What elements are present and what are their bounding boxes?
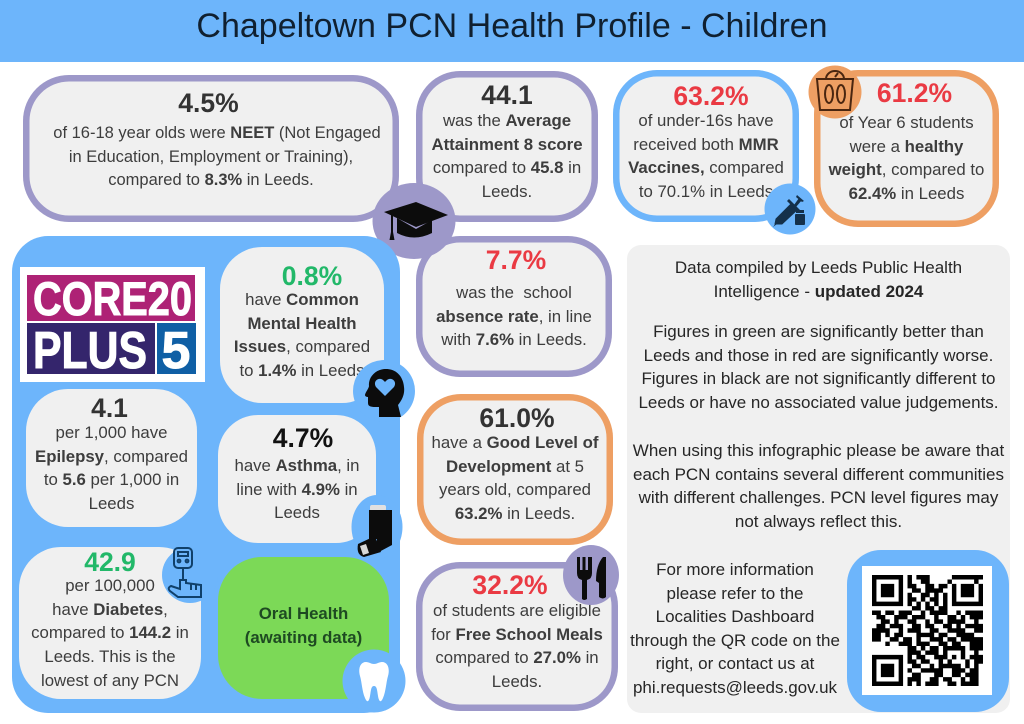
text: more information: phi.requests@leeds.gov.uk — [633, 678, 837, 697]
logo: Core20 Plus 5: PLUS — [33, 322, 147, 380]
panel: NEET statistic: in Education, Employment or Training), — [69, 148, 353, 166]
panel: epilepsy: Leeds — [89, 494, 134, 513]
panel: healthy weight statistic: of Year 6 students — [839, 113, 974, 132]
logo: Core20 Plus 5 — [20, 267, 205, 382]
panel: attainment statistic: Attainment 8 score — [431, 135, 583, 154]
panel: asthma — [218, 415, 376, 543]
panel: school absence statistic: was the school — [456, 283, 572, 302]
text: more information: please refer to the — [666, 584, 804, 603]
panel: healthy weight statistic: 61.2% — [877, 78, 952, 108]
panel: good level of development statistic — [417, 394, 613, 545]
panel: diabetes: Leeds. This is the — [44, 647, 176, 666]
panel: diabetes: 42.9 — [84, 547, 136, 577]
logo: Core20 Plus 5: CORE20 — [33, 272, 192, 325]
text: usage caution: not always reflect this. — [735, 512, 902, 531]
text: data source: Intelligence - updated 2024 — [714, 282, 923, 301]
panel: attainment statistic: Leeds. — [482, 182, 532, 201]
text: data source: Data compiled by Leeds Public Health — [675, 258, 962, 277]
panel: MMR vaccines statistic: received both MMR — [633, 135, 779, 154]
icon: head with heart — [353, 360, 415, 418]
panel: diabetes: per 100,000 — [65, 576, 155, 595]
panel: oral health awaiting data: (awaiting data) — [245, 628, 362, 647]
panel: NEET statistic: compared to 8.3% in Leeds. — [108, 171, 314, 189]
panel: epilepsy: Epilepsy, compared — [35, 447, 188, 466]
panel: free school meals statistic: 32.2% — [472, 570, 548, 600]
panel: school absence statistic — [416, 236, 612, 377]
panel: school absence statistic: 7.7% — [486, 245, 546, 275]
panel: healthy weight statistic: 62.4% in Leeds — [849, 184, 964, 203]
panel: diabetes — [19, 547, 201, 699]
panel: attainment statistic: compared to 45.8 in — [433, 158, 581, 177]
icon: fork and knife — [563, 545, 619, 605]
panel: free school meals statistic — [416, 562, 618, 711]
panel: asthma: Leeds — [274, 503, 320, 522]
QR code panel — [847, 550, 1009, 712]
panel: asthma: have Asthma, in — [234, 456, 360, 475]
icon: syringe and vial — [764, 184, 816, 234]
panel: Core20Plus5 health conditions — [12, 236, 400, 713]
panel: MMR vaccines statistic: 63.2% — [673, 81, 749, 111]
title banner: Chapeltown PCN Health Profile - Children — [196, 7, 828, 45]
icon: weighing scale — [808, 66, 862, 118]
panel: good level of development statistic: have a Good Level of — [432, 433, 598, 452]
text: significance explanation: Leeds or have no associated value judgements. — [638, 393, 999, 412]
panel: data notes — [627, 245, 1010, 713]
panel: good level of development statistic: Development at 5 — [446, 457, 584, 476]
panel: epilepsy: to 5.6 per 1,000 in — [44, 470, 179, 489]
panel: healthy weight statistic: weight, compared to — [829, 160, 984, 179]
text: data source — [675, 258, 962, 301]
panel: NEET statistic — [23, 75, 399, 222]
text: significance explanation: Leeds and those in red are significantly worse. — [644, 346, 993, 365]
text: significance explanation: Figures in green are significantly better than — [653, 322, 984, 341]
panel: healthy weight statistic: were a healthy — [850, 137, 963, 156]
panel: MMR vaccines statistic — [613, 70, 799, 222]
panel: good level of development statistic: 61.0% — [479, 403, 555, 433]
text: usage caution — [632, 441, 1004, 531]
panel: free school meals statistic: Leeds. — [492, 672, 542, 691]
text: usage caution: each PCN contains several different communities — [633, 465, 1004, 484]
panel: diabetes: lowest of any PCN — [41, 671, 179, 690]
panel: NEET statistic: 4.5% — [178, 88, 239, 118]
panel: school absence statistic: with 7.6% in Leeds. — [441, 330, 587, 349]
text: significance explanation — [638, 322, 999, 412]
panel: common mental health issues: 0.8% — [282, 261, 342, 291]
panel: asthma: line with 4.9% in — [236, 480, 358, 499]
panel: diabetes: compared to 144.2 in — [31, 623, 189, 642]
panel: common mental health issues: Mental Health — [247, 314, 357, 333]
panel: healthy weight statistic — [814, 70, 999, 227]
panel: good level of development statistic: 63.2% in Leeds. — [455, 504, 575, 523]
panel: epilepsy: per 1,000 have — [56, 423, 167, 442]
text: usage caution: with different challenges. PCN level figures may — [639, 488, 998, 507]
text: usage caution: When using this infographic please be aware that — [633, 441, 1004, 460]
panel: MMR vaccines statistic: Vaccines, compared — [628, 158, 784, 177]
panel: free school meals statistic: compared to 27.0% in — [435, 648, 599, 667]
text: more information — [630, 560, 840, 697]
panel: attainment statistic: was the Average — [443, 111, 571, 130]
title banner — [0, 0, 1024, 62]
icon: inhaler — [352, 495, 402, 557]
text: more information: For more information — [656, 560, 814, 579]
panel: free school meals statistic: for Free School Meals — [431, 625, 603, 644]
icon: graduation cap — [372, 183, 456, 259]
text: more information: right, or contact us at — [656, 654, 814, 673]
panel: common mental health issues: Issues, compared — [234, 337, 370, 356]
logo: Core20 Plus 5: 5 — [162, 322, 190, 380]
panel: epilepsy — [26, 389, 197, 527]
panel: free school meals statistic: of students are eligible — [433, 601, 601, 620]
panel: MMR vaccines statistic: to 70.1% in Leeds — [639, 182, 773, 201]
panel: oral health awaiting data — [218, 557, 389, 699]
panel: oral health awaiting data: Oral Health — [259, 604, 348, 623]
panel: NEET statistic: of 16-18 year olds were NEET (Not Engaged — [53, 124, 381, 142]
panel: common mental health issues — [220, 247, 384, 403]
panel: good level of development statistic: years old, compared — [439, 480, 591, 499]
panel: epilepsy: 4.1 — [91, 393, 128, 423]
text: significance explanation: Figures in black are not significantly different to — [641, 369, 996, 388]
panel: common mental health issues: to 1.4% in Leeds — [239, 361, 365, 380]
panel: school absence statistic: absence rate, in line — [436, 307, 592, 326]
panel: diabetes: have Diabetes, — [52, 600, 168, 619]
text: more information: Localities Dashboard — [656, 607, 814, 626]
icon: glucose meter in hand — [162, 547, 202, 603]
panel: attainment statistic — [416, 71, 598, 222]
panel: MMR vaccines statistic: of under-16s have — [638, 111, 774, 130]
panel: common mental health issues: have Common — [245, 290, 359, 309]
text: more information: through the QR code on the — [630, 631, 840, 650]
panel: asthma: 4.7% — [273, 423, 333, 453]
icon: tooth — [342, 650, 406, 712]
panel: attainment statistic: 44.1 — [481, 80, 533, 110]
